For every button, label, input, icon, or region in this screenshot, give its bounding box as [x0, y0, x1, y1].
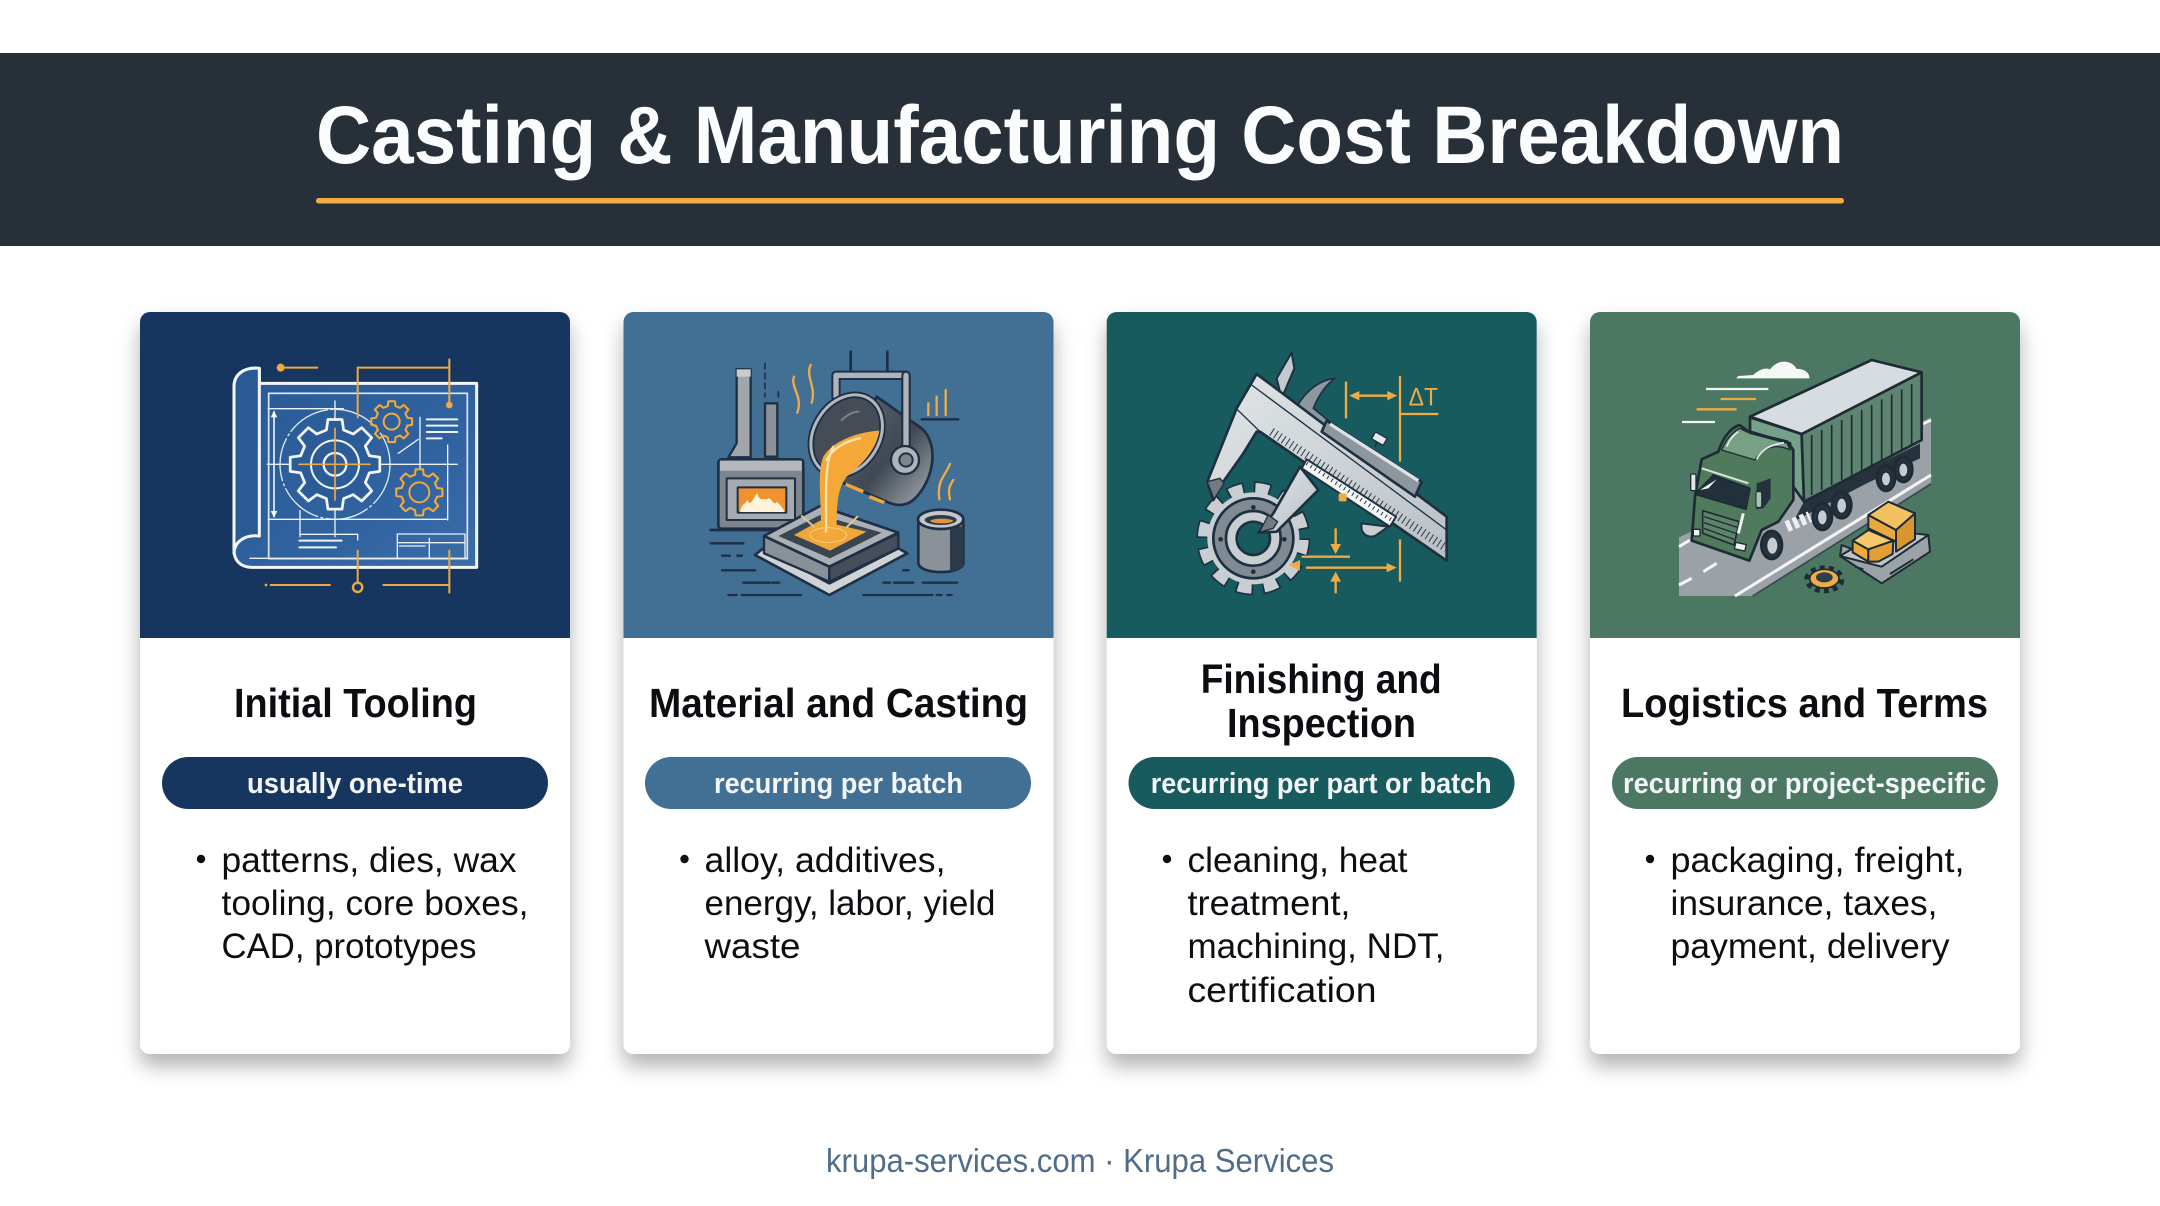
badge: recurring per part or batch [1151, 768, 1492, 800]
cloud [1736, 362, 1809, 378]
card background [140, 312, 570, 1054]
bullet list [680, 840, 996, 966]
footer credit: krupa-services.com · Krupa Services [826, 1142, 1334, 1179]
heading: Material and Casting [649, 680, 1028, 726]
hanger [836, 375, 906, 462]
small gear [1808, 569, 1841, 590]
heading: Inspection [1227, 700, 1416, 746]
bullet list: packaging, freight, [1670, 840, 1964, 880]
bullet list [197, 840, 529, 966]
trailer [1750, 417, 1804, 502]
mold [755, 548, 907, 595]
heading: Logistics and Terms [1621, 680, 1988, 726]
card image band [624, 312, 1054, 638]
rear jaw [1297, 378, 1335, 432]
boxes [1896, 513, 1915, 552]
bullet list: payment, delivery [1670, 926, 1950, 966]
panel: initial tooling [140, 312, 570, 1054]
card background [1590, 312, 2020, 1054]
bullet list: energy, labor, yield [704, 883, 996, 923]
badge: recurring per batch [714, 768, 963, 800]
dimension lines [1302, 376, 1438, 593]
card background [1107, 312, 1537, 1054]
bullet list [1646, 840, 1964, 966]
bullet list: machining, NDT, [1188, 926, 1444, 966]
card image band [1590, 312, 2020, 638]
bullet list: insurance, taxes, [1670, 883, 1938, 923]
bullet list: certification [1188, 970, 1376, 1010]
grille [1703, 511, 1739, 545]
chassis [1793, 443, 1920, 522]
bullet list: tooling, core boxes, [222, 883, 528, 923]
gear [1204, 489, 1303, 588]
ladle body [840, 397, 932, 505]
heading: Initial Tooling [234, 680, 477, 726]
bullet list: waste [703, 926, 800, 966]
bullet list: CAD, prototypes [222, 926, 476, 966]
bullet list: cleaning, heat [1188, 840, 1408, 880]
furnace [718, 459, 803, 529]
chimneys [728, 369, 751, 457]
molten stream [820, 431, 879, 537]
card image band [1107, 312, 1537, 638]
delta T label: ΔT [1409, 384, 1438, 411]
title: Casting & Manufacturing Cost Breakdown [316, 90, 1844, 181]
panel: finishing and inspection [1107, 312, 1537, 1054]
slider [1322, 421, 1422, 497]
badge [645, 757, 1031, 809]
badge [1612, 757, 1998, 809]
pallet [1840, 535, 1930, 583]
road [1679, 417, 1931, 596]
card image band [140, 312, 570, 638]
hanger pivot [891, 446, 919, 474]
badge [1128, 757, 1514, 809]
icon: truck with boxes [1679, 360, 1931, 596]
header banner [0, 53, 2160, 246]
wheels [1813, 457, 1912, 530]
bullet list: treatment, [1188, 883, 1350, 923]
bullet list: patterns, dies, wax [222, 840, 517, 880]
icon: caliper measuring a gear [1204, 353, 1447, 593]
badge: recurring or project-specific [1623, 768, 1986, 800]
panel: material and casting [624, 312, 1054, 1054]
main beam [1207, 374, 1447, 561]
title underline [316, 198, 1844, 204]
cab [1692, 425, 1793, 561]
badge: usually one-time [247, 768, 463, 800]
heading: Finishing and [1201, 656, 1442, 702]
heading [1201, 656, 1442, 746]
icon: ladle pouring metal into mold [711, 352, 963, 595]
crucible [918, 519, 963, 572]
bullet list: alloy, additives, [704, 840, 946, 880]
icon: blueprint with gears [234, 359, 477, 593]
card background [624, 312, 1054, 1054]
panel: logistics and terms [1590, 312, 2020, 1054]
badge [162, 757, 548, 809]
scale ticks [1272, 432, 1447, 548]
bullet list [1163, 840, 1444, 1010]
motion lines [1682, 389, 1768, 422]
